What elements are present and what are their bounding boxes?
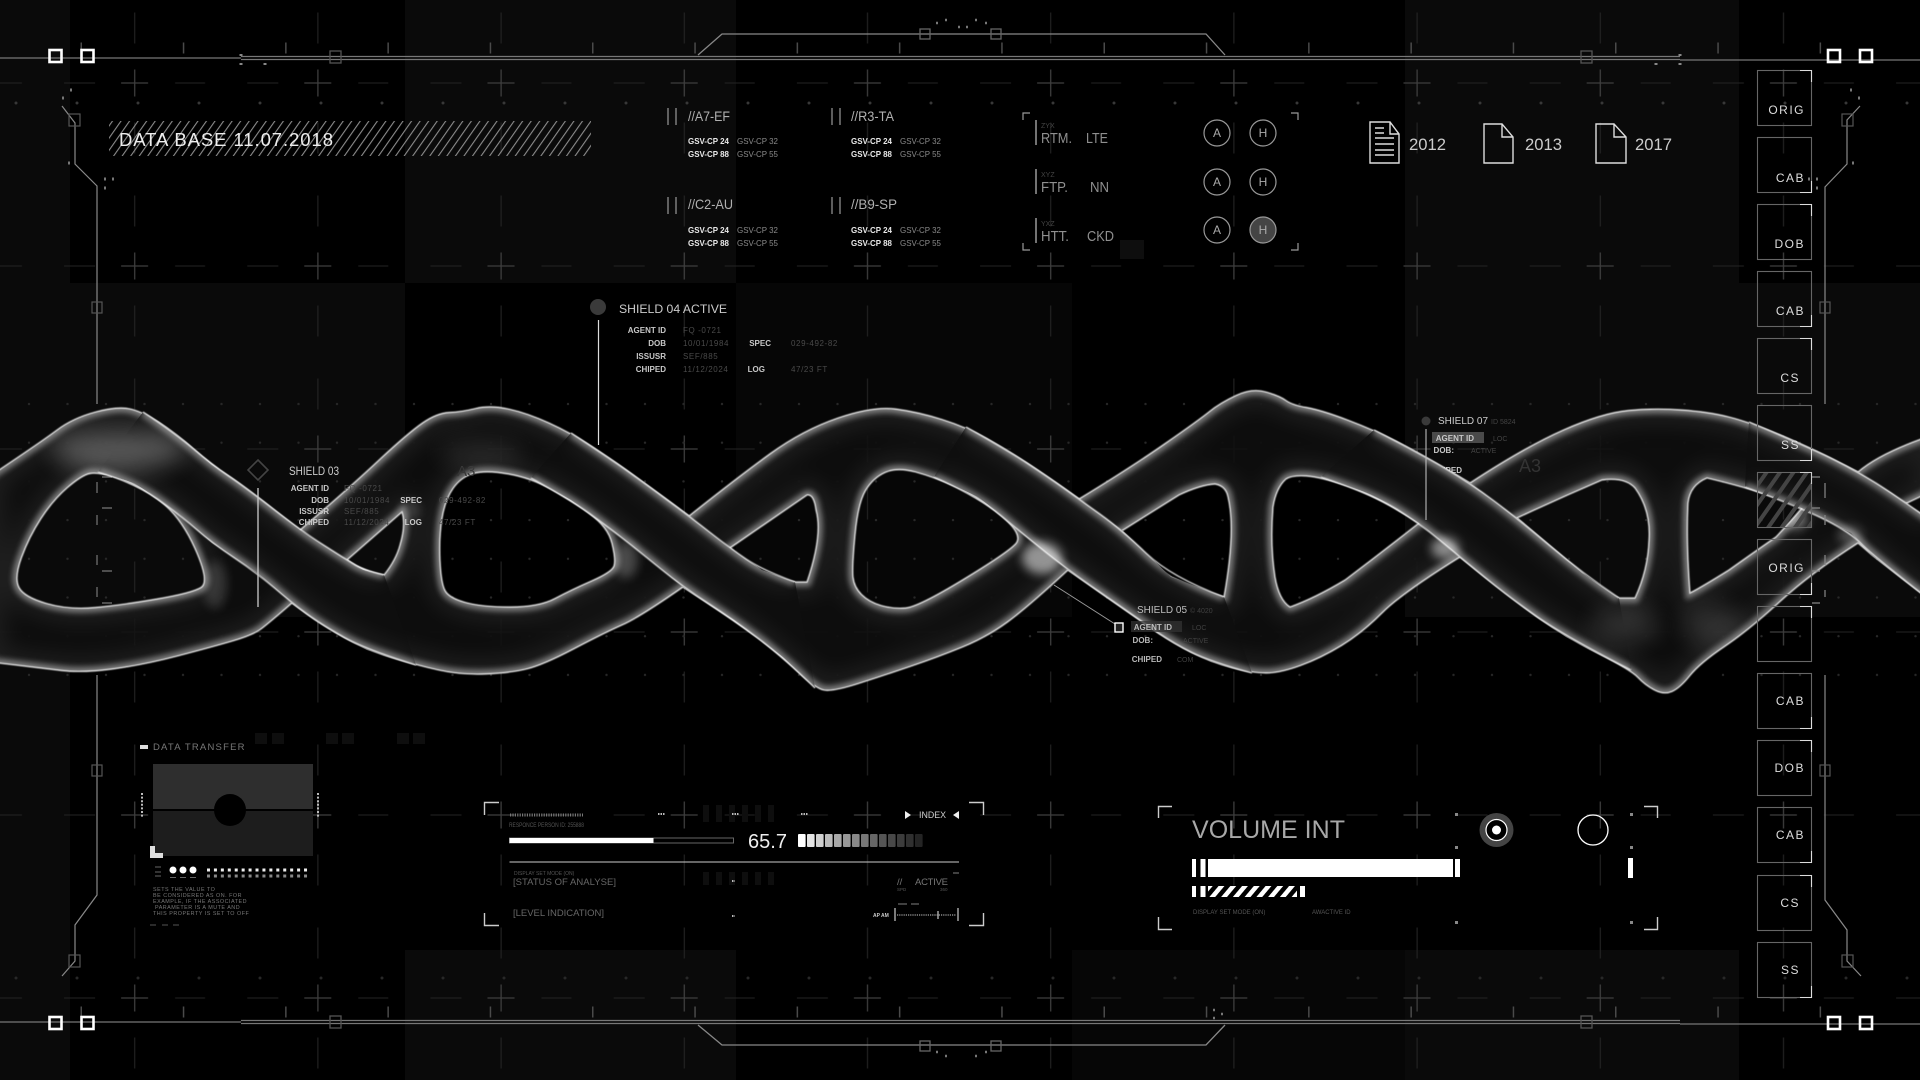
- bottom frame rail: [0, 1010, 1920, 1056]
- panel: status of analyse: DISPLAY SET MODE (ON): [514, 871, 575, 877]
- left side bracket: [62, 90, 114, 976]
- panel: protocol selector: XYZ: [1041, 172, 1055, 179]
- label: shield 04: 10/01/1984: [683, 339, 729, 348]
- block: R3-TA: GSV-CP 88: [851, 149, 892, 159]
- box: CAB: [1758, 808, 1812, 862]
- panel: protocol selector: FTP.: [1041, 179, 1068, 196]
- panel: protocol selector: NN: [1090, 179, 1109, 196]
- panel: status of analyse: SPD: [897, 887, 907, 892]
- data blocks: [668, 108, 941, 248]
- label: shield 04: [590, 299, 838, 445]
- block: B9-SP: //B9-SP: [851, 196, 897, 212]
- icon: document 2013: 2013: [1525, 135, 1562, 154]
- label: shield 07: ID 5824: [1491, 419, 1516, 426]
- panel: data transfer: EXAMPLE, IF THE ASSOCIATED: [153, 899, 247, 905]
- callout line: shield 05: [1054, 585, 1123, 632]
- block: A7-EF: GSV-CP 55: [737, 149, 778, 159]
- label: shield 03: ISSUSR: [299, 507, 329, 516]
- label: shield 04: 47/23 FT: [791, 365, 828, 374]
- label: shield 05: [1131, 605, 1213, 664]
- panel: status of analyse: //: [897, 877, 903, 888]
- panel: status of analyse: ACTIVE: [915, 877, 948, 888]
- icon: document 2017: 2017: [1635, 135, 1672, 154]
- block: B9-SP: GSV-CP 24: [851, 225, 892, 235]
- box: CAB: [1758, 674, 1812, 728]
- box: DOB: [1758, 740, 1812, 796]
- label: shield 04: 11/12/2024: [683, 365, 728, 374]
- box: DOB: DOB: [1774, 237, 1805, 251]
- panel: data transfer: PARAMETER IS A MUTE AND: [155, 905, 240, 911]
- front strand 1: [98, 412, 416, 665]
- panel: protocol selector: ZYX: [1041, 123, 1055, 130]
- segmented level meter: [798, 834, 923, 847]
- panel: status of analyse: 360: [940, 887, 948, 892]
- label: shield 04: SPEC: [749, 339, 771, 348]
- box: ORIG: ORIG: [1768, 103, 1805, 117]
- block: C2-AU: [668, 196, 778, 248]
- hatched bar: [1192, 886, 1305, 897]
- label: shield 05: COM: [1177, 657, 1194, 664]
- box: SS: [1758, 942, 1812, 998]
- box: CAB: [1758, 272, 1812, 326]
- volume bar: [1192, 859, 1460, 877]
- left hole scale ticks: [97, 477, 112, 603]
- panel: protocol selector: YXZ: [1041, 221, 1055, 228]
- block: A7-EF: GSV-CP 88: [688, 149, 729, 159]
- label: shield 04: FQ -0721: [683, 326, 722, 335]
- panel: protocol selector: CKD: [1087, 228, 1114, 245]
- label: shield 07: DOB:: [1434, 446, 1454, 455]
- label: shield 07: LOC: [1493, 436, 1507, 443]
- DNA double helix: [0, 391, 1920, 693]
- panel: protocol selector: A: [1213, 126, 1221, 140]
- block: C2-AU: GSV-CP 55: [737, 238, 778, 248]
- front strand 2: [531, 433, 815, 688]
- label: shield 04: ISSUSR: [636, 352, 666, 361]
- label: shield 07: A3: [1519, 456, 1541, 476]
- box: CS: [1758, 338, 1812, 394]
- box: DOB: [1758, 204, 1812, 260]
- label: shield 03: CHIPED: [299, 518, 329, 527]
- block: A7-EF: GSV-CP 32: [737, 136, 778, 146]
- label: shield 03: 11/12/2024: [344, 518, 389, 527]
- top frame rail: [0, 20, 1920, 65]
- panel: volume int: AWACTIVE ID: [1312, 910, 1351, 916]
- panel: status of analyse: [484, 802, 984, 926]
- panel: status of analyse: [LEVEL INDICATION]: [513, 908, 604, 919]
- box: CAB: CAB: [1776, 828, 1805, 842]
- icon: target dial: [1480, 813, 1514, 847]
- label: shield 04: DOB: [648, 339, 666, 348]
- box: CAB: CAB: [1776, 171, 1805, 185]
- block: R3-TA: GSV-CP 24: [851, 136, 892, 146]
- block: C2-AU: GSV-CP 24: [688, 225, 729, 235]
- block: A7-EF: //A7-EF: [688, 108, 730, 124]
- label: shield 05: CHIPED: [1132, 655, 1162, 664]
- block: C2-AU: GSV-CP 32: [737, 225, 778, 235]
- panel: protocol selector: [1023, 113, 1298, 250]
- label: shield 03: 10/01/1984: [344, 496, 390, 505]
- label: shield 03: A3: [457, 463, 475, 480]
- box: CS: [1758, 876, 1812, 930]
- label: shield 05: LOC: [1192, 625, 1206, 632]
- label: shield 03: SPEC: [400, 496, 422, 505]
- label: shield 07: ACTIVE: [1471, 448, 1497, 455]
- panel: status of analyse: 65.7: [748, 831, 787, 853]
- box: CS: CS: [1780, 371, 1800, 385]
- label: shield 03: 47/23 FT: [439, 518, 476, 527]
- panel: status of analyse: RESPONCE PERSON ID: 255888: [509, 823, 585, 829]
- label: shield 03: 029-492-82: [439, 496, 486, 505]
- panel: data transfer: DATA TRANSFER: [153, 742, 246, 753]
- box: ORIG: ORIG: [1768, 561, 1805, 575]
- block: A7-EF: GSV-CP 24: [688, 136, 729, 146]
- panel: protocol selector: A: [1213, 175, 1221, 189]
- callout line: shield 03: [257, 488, 259, 607]
- label: shield 03: LOG: [405, 518, 422, 527]
- panel: data transfer: [140, 742, 318, 925]
- callout line: shield 07: [1425, 429, 1427, 520]
- panel: protocol selector: H: [1259, 223, 1267, 237]
- label: shield 04: SHIELD 04 ACTIVE: [619, 302, 727, 316]
- icon: document 2013: [1484, 124, 1562, 163]
- box: SS: [1758, 406, 1812, 460]
- box: DOB: DOB: [1774, 761, 1805, 775]
- label: shield 03: AGENT ID: [291, 484, 329, 493]
- block: R3-TA: GSV-CP 55: [900, 149, 941, 159]
- label: shield 07: [1422, 416, 1541, 476]
- block: C2-AU: //C2-AU: [688, 196, 733, 212]
- right column index boxes: [1758, 70, 1812, 998]
- helix highlights: [52, 430, 1862, 645]
- front strand 5: [1745, 422, 1920, 600]
- panel: data transfer: BE CONSIDERED AS ON. FOR: [153, 893, 242, 899]
- front strand 4: [1321, 430, 1631, 670]
- panel: volume int: VOLUME INT: [1192, 816, 1345, 844]
- panel: status of analyse: [STATUS OF ANALYSE]: [513, 877, 616, 888]
- label: shield 05: DOB:: [1133, 636, 1153, 645]
- label: shield 03: [248, 460, 606, 527]
- box: ORIG: [1758, 540, 1812, 594]
- panel: protocol selector: A: [1213, 223, 1221, 237]
- box: CS: CS: [1780, 896, 1800, 910]
- panel: status of analyse: INDEX: [919, 810, 947, 821]
- box: SS: SS: [1781, 438, 1800, 452]
- block: R3-TA: //R3-TA: [851, 108, 895, 124]
- box: CAB: CAB: [1776, 304, 1805, 318]
- title: data base: [109, 121, 591, 156]
- label: shield 05: © 4020: [1190, 607, 1213, 615]
- panel: protocol selector: HTT.: [1041, 228, 1069, 245]
- panel: data transfer: SETS THE VALUE TO: [153, 887, 215, 893]
- helix silhouette: [0, 391, 1920, 693]
- box: SS: SS: [1781, 963, 1800, 977]
- block: A7-EF: [668, 108, 778, 159]
- label: shield 04: SEF/885: [683, 352, 718, 361]
- label: shield 07: CHIPED: [1432, 466, 1462, 475]
- box: ORIG: [1758, 70, 1812, 126]
- block: B9-SP: GSV-CP 88: [851, 238, 892, 248]
- icon: document 2017: [1596, 124, 1672, 163]
- block: B9-SP: GSV-CP 32: [900, 225, 941, 235]
- front strand 3: [934, 427, 1252, 673]
- icon: document 2012: 2012: [1409, 135, 1446, 154]
- panel: volume int: [1158, 806, 1658, 930]
- label: shield 05: SHIELD 05: [1137, 605, 1187, 616]
- faint dark squares: [255, 240, 1144, 885]
- title: data base: DATA BASE 11.07.2018: [119, 129, 333, 150]
- block: R3-TA: GSV-CP 32: [900, 136, 941, 146]
- block: R3-TA: [832, 108, 941, 159]
- block: B9-SP: GSV-CP 55: [900, 238, 941, 248]
- label: shield 04: CHIPED: [636, 365, 666, 374]
- label: shield 05: AGENT ID: [1134, 623, 1172, 632]
- label: shield 04: LOG: [748, 365, 765, 374]
- year documents: [1370, 122, 1672, 163]
- icon: document 2012: [1370, 122, 1446, 163]
- panel: protocol selector: LTE: [1086, 130, 1108, 147]
- panel: protocol selector: H: [1259, 175, 1267, 189]
- block: B9-SP: [832, 196, 941, 248]
- label: shield 04: AGENT ID: [628, 326, 666, 335]
- box: CAB: CAB: [1776, 694, 1805, 708]
- label: shield 03: FQ -0721: [344, 484, 383, 493]
- label: shield 04: 029-492-82: [791, 339, 838, 348]
- box: CAB: [1758, 138, 1812, 192]
- box: blank: [1758, 606, 1812, 662]
- label: shield 03: DOB: [311, 496, 329, 505]
- panel: protocol selector: H: [1259, 126, 1267, 140]
- panel: data transfer: THIS PROPERTY IS SET TO OFF: [153, 911, 249, 917]
- label: shield 03: SHIELD 03: [289, 464, 339, 478]
- label: shield 07: SHIELD 07: [1438, 416, 1488, 427]
- panel: volume int: DISPLAY SET MODE (ON): [1193, 910, 1265, 916]
- icon: ring: [1578, 815, 1608, 845]
- panel: status of analyse: AP AM: [873, 913, 889, 919]
- box: hatched: [1758, 472, 1812, 528]
- label: shield 03: SEF/885: [344, 507, 379, 516]
- right side bracket: [1808, 90, 1861, 976]
- block: C2-AU: GSV-CP 88: [688, 238, 729, 248]
- panel: protocol selector: RTM.: [1041, 130, 1072, 147]
- label: shield 07: AGENT ID: [1436, 434, 1474, 443]
- label: shield 05: ACTIVE: [1183, 638, 1209, 645]
